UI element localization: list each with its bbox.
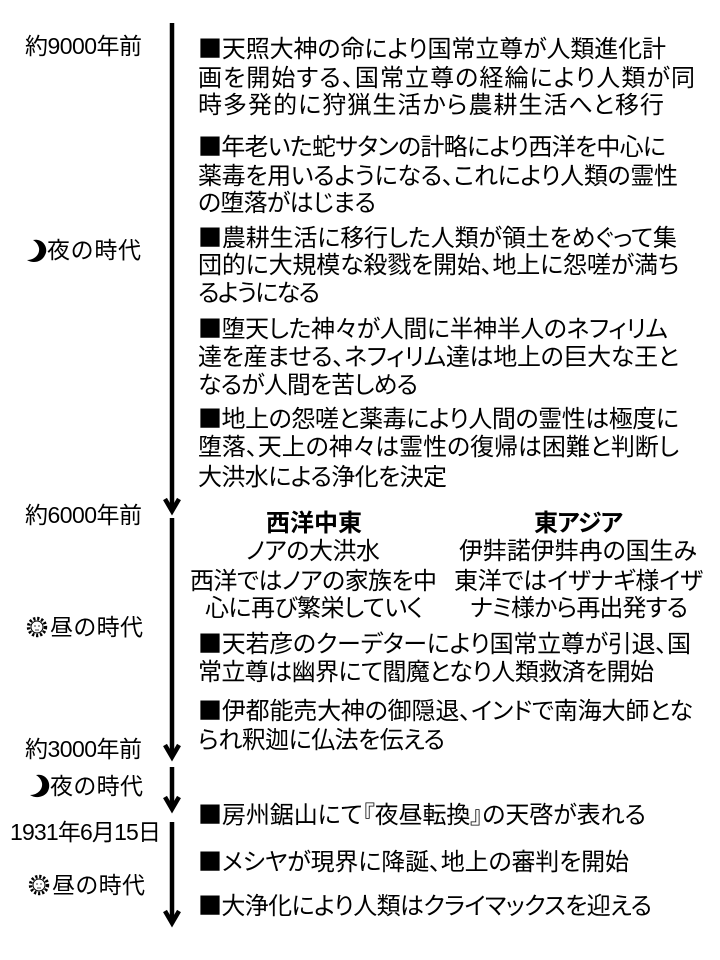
label: night era 1: 夜の時代 (47, 237, 141, 263)
icon: sun (28, 618, 46, 636)
label: about 3000 years ago: 約3000年前 (25, 736, 142, 762)
text block: decision for the great flood (198, 399, 679, 491)
text block: territorial slaughter: るようになる (198, 280, 320, 307)
arrow: timeline night era 1 (165, 23, 179, 511)
text block: Nephilim: なるが人間を苦しめる (198, 372, 418, 399)
column: West and Middle East: ノアの大洪水 (246, 538, 380, 565)
label: night era 2: 夜の時代 (50, 773, 143, 799)
text block: territorial slaughter (198, 218, 679, 307)
icon: crescent moon (27, 240, 46, 262)
text block: revelation at Mt Nokogiri: ■房州鋸山にて『夜昼転換』の天啓が表れる (198, 795, 646, 830)
text block: Amewakahiko coup (198, 624, 691, 686)
text block: Izunome retirement: られ釈迦に仏法を伝える (198, 727, 445, 754)
label: about 9000 years ago: 約9000年前 (25, 33, 142, 59)
arrow: timeline day era 1 (165, 518, 179, 757)
text block: Satan and medicine poison: 薬毒を用いるようになる、これにより人類の霊性 (198, 163, 678, 190)
text block: Izunome retirement: ■伊都能売大神の御隠退、インドで南海大師とな (198, 691, 693, 726)
column: West and Middle East: 心に再び繁栄していく (205, 595, 423, 622)
label: day era 2: 昼の時代 (52, 872, 145, 898)
column: East Asia: 東洋ではイザナギ様イザ (454, 568, 703, 595)
text block: decision for the great flood: 堕落、天上の神々は霊性の復帰は困難と判断し (198, 434, 679, 461)
text block: Amaterasu plan: 画を開始する、国常立尊の経綸により人類が同 (198, 65, 695, 92)
label: day era 1: 昼の時代 (50, 614, 143, 640)
text block: Amewakahiko coup: ■天若彦のクーデターにより国常立尊が引退、国 (198, 624, 691, 659)
icon: crescent moon (30, 775, 49, 797)
arrow: timeline night era 2 (165, 767, 179, 809)
text block: decision for the great flood: 大洪水による浄化を決定 (198, 464, 447, 491)
text block: Messiah: ■メシヤが現界に降誕、地上の審判を開始 (198, 842, 629, 877)
text block: Satan and medicine poison: の堕落がはじまる (198, 190, 376, 217)
label: about 6000 years ago: 約6000年前 (25, 502, 142, 528)
text block: territorial slaughter: 団的に大規模な殺戮を開始、地上に怨嗟が満ち (198, 252, 679, 279)
label: date 1931-06-15: 1931年6月15日 (10, 819, 161, 845)
text block: Amaterasu plan (198, 29, 695, 119)
text block: Nephilim: 達を産ませる、ネフィリム達は地上の巨大な王と (198, 344, 679, 371)
text block: Amewakahiko coup: 常立尊は幽界にて閻魔となり人類救済を開始 (198, 659, 654, 686)
text block: Amaterasu plan: 時多発的に狩猟生活から農耕生活へと移行 (198, 92, 664, 119)
column: West and Middle East (190, 510, 437, 622)
column: East Asia (454, 510, 703, 622)
text block: great purification: ■大浄化により人類はクライマックスを迎える (198, 886, 652, 921)
text block: Satan and medicine poison (198, 127, 678, 217)
column: East Asia: ナミ様から再出発する (470, 595, 688, 622)
text block: Nephilim (198, 309, 679, 399)
text block: Amaterasu plan: ■天照大神の命により国常立尊が人類進化計 (198, 29, 666, 64)
column: East Asia: 東アジア (534, 510, 623, 537)
text block: decision for the great flood: ■地上の怨嗟と薬毒により人間の霊性は極度に (198, 399, 679, 434)
text block: Nephilim: ■堕天した神々が人間に半神半人のネフィリム (198, 309, 668, 344)
text block: territorial slaughter: ■農耕生活に移行した人類が領土をめぐって集 (198, 218, 677, 253)
column: West and Middle East: 西洋ではノアの家族を中 (190, 568, 437, 595)
column: East Asia: 伊弉諾伊弉冉の国生み (459, 538, 697, 565)
column: West and Middle East: 西洋中東 (266, 510, 362, 537)
text block: Satan and medicine poison: ■年老いた蛇サタンの計略により西洋を中心に (198, 127, 666, 162)
icon: sun (30, 876, 48, 894)
text block: Izunome retirement (198, 691, 693, 754)
arrow: timeline day era 2 (165, 822, 179, 923)
